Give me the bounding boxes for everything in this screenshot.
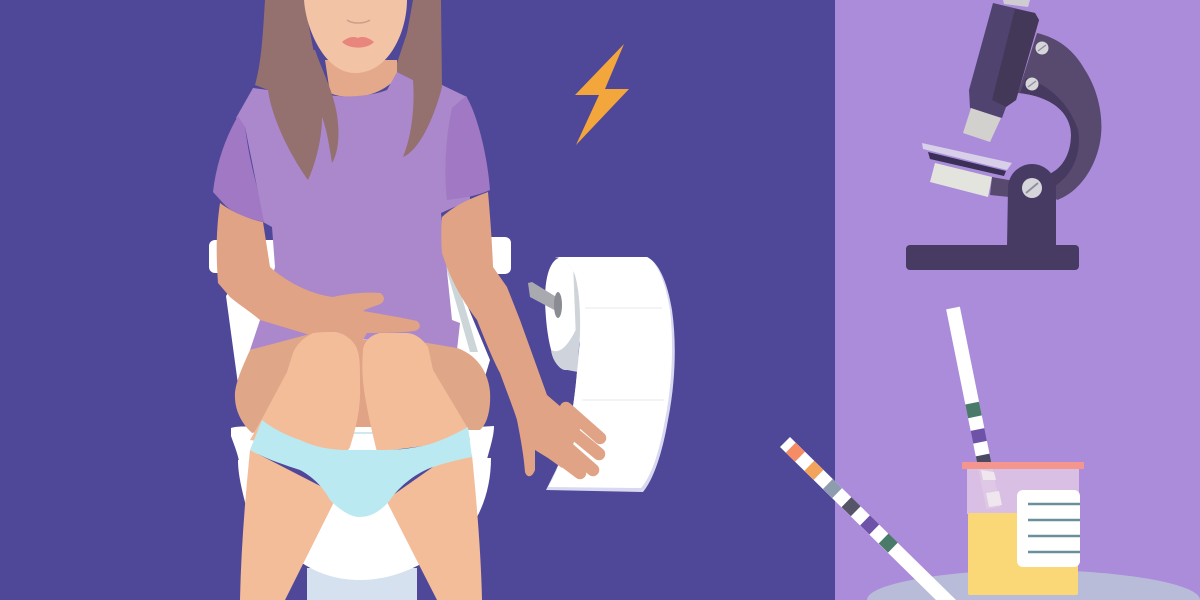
knee: right <box>362 333 470 452</box>
hair: right lock <box>403 70 442 157</box>
underwear <box>250 420 472 517</box>
arm: right arm and palm <box>441 192 582 476</box>
hair: back section <box>255 0 320 85</box>
face <box>304 0 407 73</box>
microscope arm <box>1018 33 1101 200</box>
icon: microscope <box>906 0 1101 270</box>
shirt: right sleeve <box>445 96 490 200</box>
test strip leaning on table <box>780 437 956 600</box>
microscope screws <box>1022 42 1048 198</box>
strip body <box>780 437 956 600</box>
knee: left <box>250 332 360 455</box>
toilet: lid, seat, bowl and base <box>209 237 511 600</box>
microscope body tube <box>969 3 1039 118</box>
beaker rim <box>962 462 1084 469</box>
arm: hand on belly <box>217 203 420 345</box>
microscope objective lens <box>963 108 1001 142</box>
figure: seated woman <box>213 0 600 600</box>
hand: fingers <box>544 408 600 473</box>
microscope condenser <box>930 163 992 197</box>
label text lines <box>1028 504 1080 552</box>
test strip standing in beaker <box>946 307 1000 509</box>
urine sample beaker <box>962 462 1084 595</box>
beaker glass <box>967 468 1079 514</box>
lips <box>342 37 374 48</box>
panel: dark indigo background <box>0 0 835 600</box>
microscope arm shading <box>1020 78 1079 190</box>
thigh: left <box>235 334 310 433</box>
microscope stage underside <box>928 152 1006 176</box>
icon: toilet paper roll <box>528 257 675 492</box>
table shadow ellipse <box>867 570 1200 600</box>
beaker label <box>1017 490 1080 567</box>
hair: back right section <box>397 0 442 87</box>
leg: right shin <box>386 455 482 600</box>
hair: left lock <box>255 50 338 180</box>
icon: lightning bolt <box>575 44 629 145</box>
microscope stage top <box>922 143 1012 170</box>
microscope connector <box>990 177 1020 198</box>
skin gap between knees <box>350 340 372 427</box>
urine liquid <box>968 513 1078 595</box>
neck <box>325 60 397 97</box>
strip seen through glass <box>981 470 1002 507</box>
leg: left shin <box>240 450 335 600</box>
microscope top silver <box>1003 0 1030 7</box>
nose <box>347 20 370 23</box>
microscope base <box>906 245 1079 270</box>
microscope tube shading <box>992 9 1039 107</box>
microscope pillar <box>1007 164 1056 247</box>
panel: light purple lab background <box>835 0 1200 600</box>
strip colour pads <box>786 443 898 553</box>
shirt: body <box>236 72 470 350</box>
shirt: left sleeve <box>213 116 264 222</box>
thigh: right <box>410 340 490 430</box>
